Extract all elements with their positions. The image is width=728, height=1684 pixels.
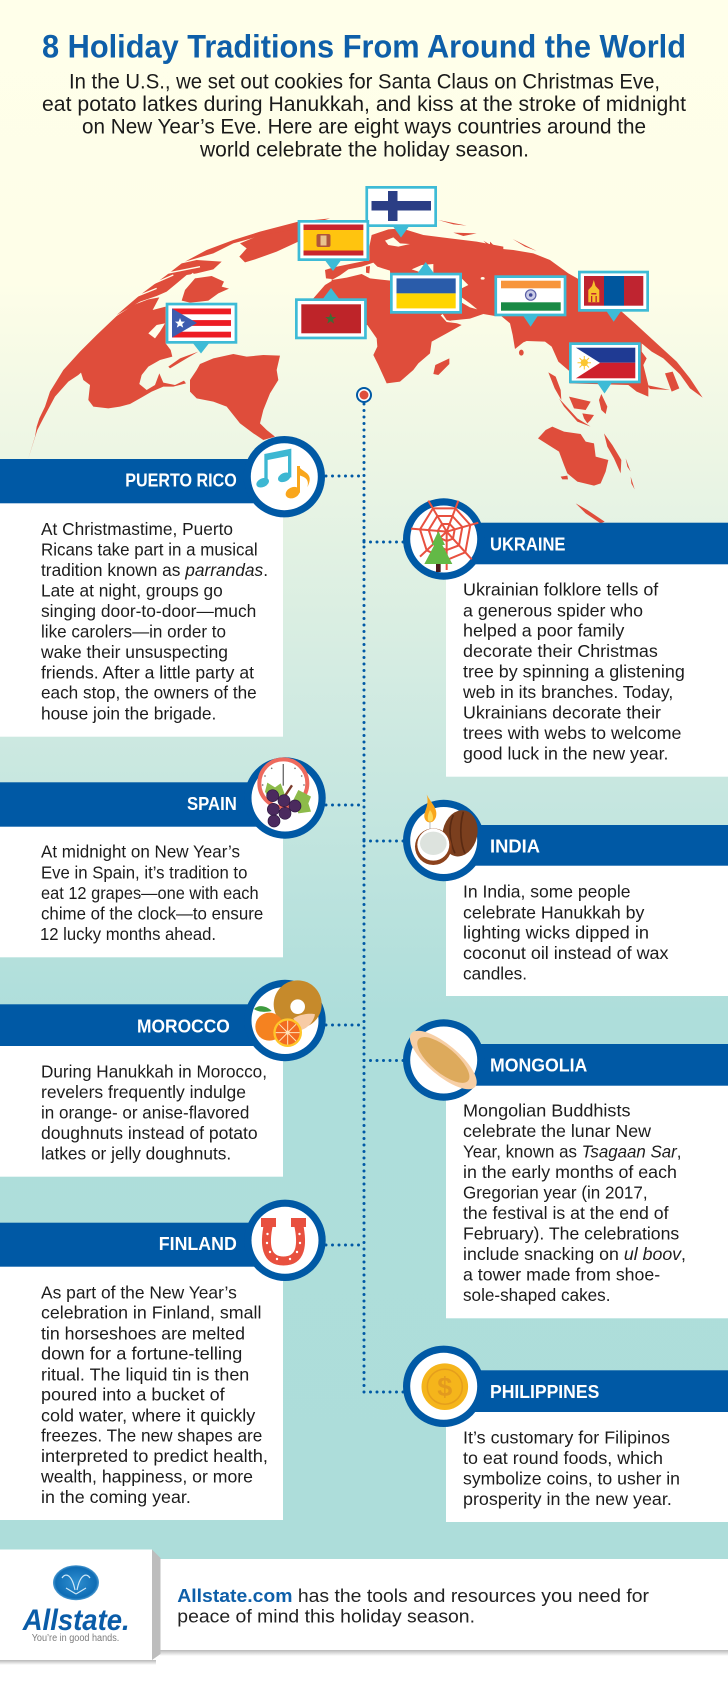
heading: Mongolia: MONGOLIA <box>490 1056 587 1076</box>
icon: coin <box>422 1363 468 1410</box>
flag: Spain <box>298 220 369 271</box>
heading: India: INDIA <box>490 836 540 856</box>
flag: Finland <box>365 186 437 238</box>
body text: Spain: eat 12 grapes—one with each <box>41 883 259 903</box>
flag: Ukraine <box>390 262 462 314</box>
heading: Ukraine: UKRAINE <box>490 535 566 555</box>
body text: Philippines: to eat round foods, which <box>463 1448 663 1468</box>
heading: Finland: FINLAND <box>159 1234 237 1254</box>
panel: Spain <box>0 757 326 957</box>
timeline start marker <box>356 387 372 403</box>
intro text: In the U.S., we set out cookies for Santa Claus on Christmas Eve, <box>69 70 660 93</box>
body text: Mongolia: the festival is at the end of <box>463 1203 669 1223</box>
title: 8 Holiday Traditions From Around the World <box>42 28 686 64</box>
body text: India <box>463 882 669 983</box>
body text: Finland: As part of the New Year’s <box>41 1282 237 1302</box>
body text: Ukraine: decorate their Christmas <box>463 641 658 661</box>
body text: Finland <box>40 1282 268 1507</box>
body text: Ukraine: a generous spider who <box>463 600 643 620</box>
intro text: world celebrate the holiday season. <box>199 138 529 161</box>
world map <box>28 218 703 523</box>
footer banner <box>160 1559 728 1656</box>
body text: Spain <box>40 842 263 944</box>
body text: Mongolia: Year, known as Tsagaan Sar, <box>463 1142 682 1162</box>
body text: Finland: cold water, where it quickly <box>41 1405 256 1425</box>
body text: Morocco: in orange- or anise-flavored <box>41 1102 249 1122</box>
body text: Finland: down for a fortune-telling <box>41 1344 242 1364</box>
body text: Ukraine: tree by spinning a glistening <box>463 662 685 682</box>
body text: Finland: celebration in Finland, small <box>41 1303 261 1323</box>
panel: India <box>403 794 728 996</box>
intro text: eat potato latkes during Hanukkah, and kiss at the stroke of midnight <box>42 93 686 116</box>
body text: Finland: interpreted to predict health, <box>41 1446 268 1466</box>
flag: Morocco <box>295 288 367 339</box>
icon: coin: $ <box>437 1372 452 1402</box>
body text: Mongolia: a tower made from shoe- <box>463 1265 660 1285</box>
body text: Mongolia: February). The celebrations <box>463 1223 679 1243</box>
body text: Finland: in the coming year. <box>41 1487 191 1507</box>
body text: Ukraine <box>462 580 685 763</box>
body text: Ukraine: Ukrainian folklore tells of <box>463 580 658 600</box>
logo wordmark: Allstate. <box>22 1604 130 1637</box>
body text: India: candles. <box>463 963 527 983</box>
body text: Mongolia: celebrate the lunar New <box>463 1121 651 1141</box>
body text: Finland: poured into a bucket of <box>41 1385 225 1405</box>
body text: India: coconut oil instead of wax <box>463 943 669 963</box>
body text: Puerto Rico: Late at night, groups go <box>41 580 223 600</box>
Allstate logo card <box>0 1550 160 1665</box>
body text: Puerto Rico: tradition known as parrandas. <box>41 560 268 580</box>
body text: Spain: At midnight on New Year’s <box>41 842 240 862</box>
body text: Finland: wealth, happiness, or more <box>40 1467 253 1487</box>
body text: Mongolia: sole-shaped cakes. <box>463 1285 610 1305</box>
heading: Puerto Rico: PUERTO RICO <box>125 471 237 491</box>
body text: Ukraine: web in its branches. Today, <box>462 682 673 702</box>
body text: Morocco: latkes or jelly doughnuts. <box>41 1143 231 1163</box>
body text: Morocco: During Hanukkah in Morocco, <box>41 1061 267 1081</box>
dotted timeline <box>326 404 404 1392</box>
body text: Ukraine: good luck in the new year. <box>463 743 668 763</box>
panel: Mongolia <box>402 1019 728 1318</box>
footer text: peace of mind this holiday season. <box>177 1605 475 1626</box>
body text: Ukraine: helped a poor family <box>463 621 625 641</box>
body text: Morocco <box>41 1061 267 1163</box>
heading: Spain: SPAIN <box>187 794 237 814</box>
body text: Mongolia: Gregorian year (in 2017, <box>463 1183 648 1203</box>
flag: Philippines <box>569 342 641 394</box>
body text: Philippines <box>463 1428 680 1509</box>
body text: Puerto Rico: At Christmastime, Puerto <box>41 519 233 539</box>
body text: Puerto Rico: singing door-to-door—much <box>41 601 256 621</box>
panel: Finland <box>0 1200 326 1520</box>
body text: Ukraine: trees with webs to welcome <box>463 723 682 743</box>
body text: Puerto Rico: house join the brigade. <box>41 703 216 723</box>
intro text: on New Year’s Eve. Here are eight ways countries around the <box>82 116 646 139</box>
logo tagline: You’re in good hands. <box>32 1633 119 1644</box>
body text: Puerto Rico: Ricans take part in a musical <box>41 540 258 560</box>
icon: shoe-sole cake <box>402 1021 485 1099</box>
panel: Philippines <box>403 1346 728 1522</box>
icon: clock and grapes <box>259 759 311 827</box>
body text: Ukraine: Ukrainians decorate their <box>463 703 661 723</box>
panel: Morocco <box>0 980 326 1177</box>
body text: Philippines: prosperity in the new year. <box>463 1489 672 1509</box>
flag: India <box>494 275 566 327</box>
body text: Puerto Rico: like carolers—in order to <box>41 621 226 641</box>
icon: horseshoe <box>261 1218 306 1261</box>
panel: Ukraine <box>403 498 728 777</box>
body text: Puerto Rico: friends. After a little party at <box>41 662 254 682</box>
footer text <box>177 1585 649 1626</box>
flag: Mongolia <box>578 271 649 322</box>
body text: India: In India, some people <box>463 882 630 902</box>
body text: Philippines: It’s customary for Filipinos <box>463 1428 670 1448</box>
heading: Morocco: MOROCCO <box>137 1016 230 1036</box>
intro text <box>42 70 686 161</box>
body text: Morocco: doughnuts instead of potato <box>41 1123 258 1143</box>
icon: spider web and tree <box>411 501 478 572</box>
body text: Mongolia <box>463 1101 686 1305</box>
body text: Spain: Eve in Spain, it’s tradition to <box>41 862 248 882</box>
icon: coconut and flame <box>415 794 482 865</box>
icon: Allstate good hands globe <box>53 1565 99 1600</box>
body text: Mongolia: in the early months of each <box>463 1162 677 1182</box>
heading: Philippines: PHILIPPINES <box>490 1382 599 1402</box>
body text: Spain: chime of the clock—to ensure <box>41 903 263 923</box>
footer text: Allstate.com has the tools and resources you need for <box>177 1585 649 1606</box>
body text: Puerto Rico <box>40 519 268 723</box>
body text: Mongolia: Mongolian Buddhists <box>463 1101 631 1121</box>
flag: Puerto Rico <box>166 303 237 354</box>
body text: Philippines: symbolize coins, to usher in <box>463 1469 680 1489</box>
body text: Finland: tin horseshoes are melted <box>41 1323 245 1343</box>
body text: Mongolia: include snacking on ul boov, <box>463 1244 686 1264</box>
icon: doughnut and orange <box>254 980 322 1047</box>
body text: Puerto Rico: each stop, the owners of the <box>41 683 257 703</box>
body text: Finland: ritual. The liquid tin is then <box>41 1364 249 1384</box>
body text: Finland: freezes. The new shapes are <box>41 1426 262 1446</box>
body text: India: lighting wicks dipped in <box>463 923 649 943</box>
body text: India: celebrate Hanukkah by <box>463 902 645 922</box>
body text: Puerto Rico: wake their unsuspecting <box>40 642 228 662</box>
panel: Puerto Rico <box>0 436 325 737</box>
body text: Morocco: revelers frequently indulge <box>41 1082 246 1102</box>
body text: Spain: 12 lucky months ahead. <box>40 924 216 944</box>
icon: music notes <box>255 449 310 501</box>
